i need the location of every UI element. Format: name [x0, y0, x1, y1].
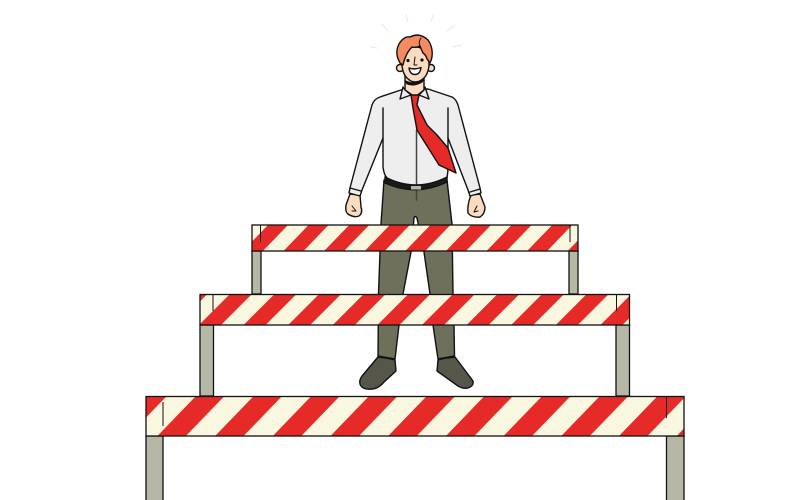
notch marks — [260, 225, 570, 242]
hand finger marks — [352, 206, 478, 212]
nose — [414, 57, 417, 65]
man — [346, 35, 485, 389]
trousers — [378, 180, 454, 359]
left eye — [406, 59, 410, 62]
notch marks — [163, 397, 666, 426]
hair parting — [419, 38, 421, 46]
top barrier — [252, 225, 578, 251]
hair — [397, 35, 432, 65]
neck shadow — [405, 79, 424, 86]
right collar — [419, 87, 429, 99]
belt buckle — [411, 186, 421, 190]
board — [252, 225, 578, 251]
board — [200, 294, 630, 325]
left shoe — [360, 357, 396, 389]
board — [146, 396, 684, 436]
right eye — [420, 58, 424, 62]
right hand — [468, 194, 485, 217]
bottom barrier — [146, 396, 684, 436]
tie — [411, 95, 456, 173]
left ear — [396, 64, 404, 72]
face — [402, 47, 429, 82]
shirt placket — [416, 130, 418, 200]
right ear — [428, 64, 434, 72]
left collar — [400, 87, 411, 99]
notch marks — [213, 295, 616, 311]
radiating lines above head — [370, 14, 462, 48]
barrier posts — [146, 251, 684, 500]
left hand — [346, 194, 362, 217]
belt — [385, 177, 447, 190]
neck — [405, 76, 424, 97]
right shoe — [437, 357, 473, 388]
shirt — [349, 89, 481, 196]
mouth — [409, 68, 421, 74]
middle barrier — [200, 294, 630, 325]
shirt seams and cuffs — [350, 108, 480, 192]
